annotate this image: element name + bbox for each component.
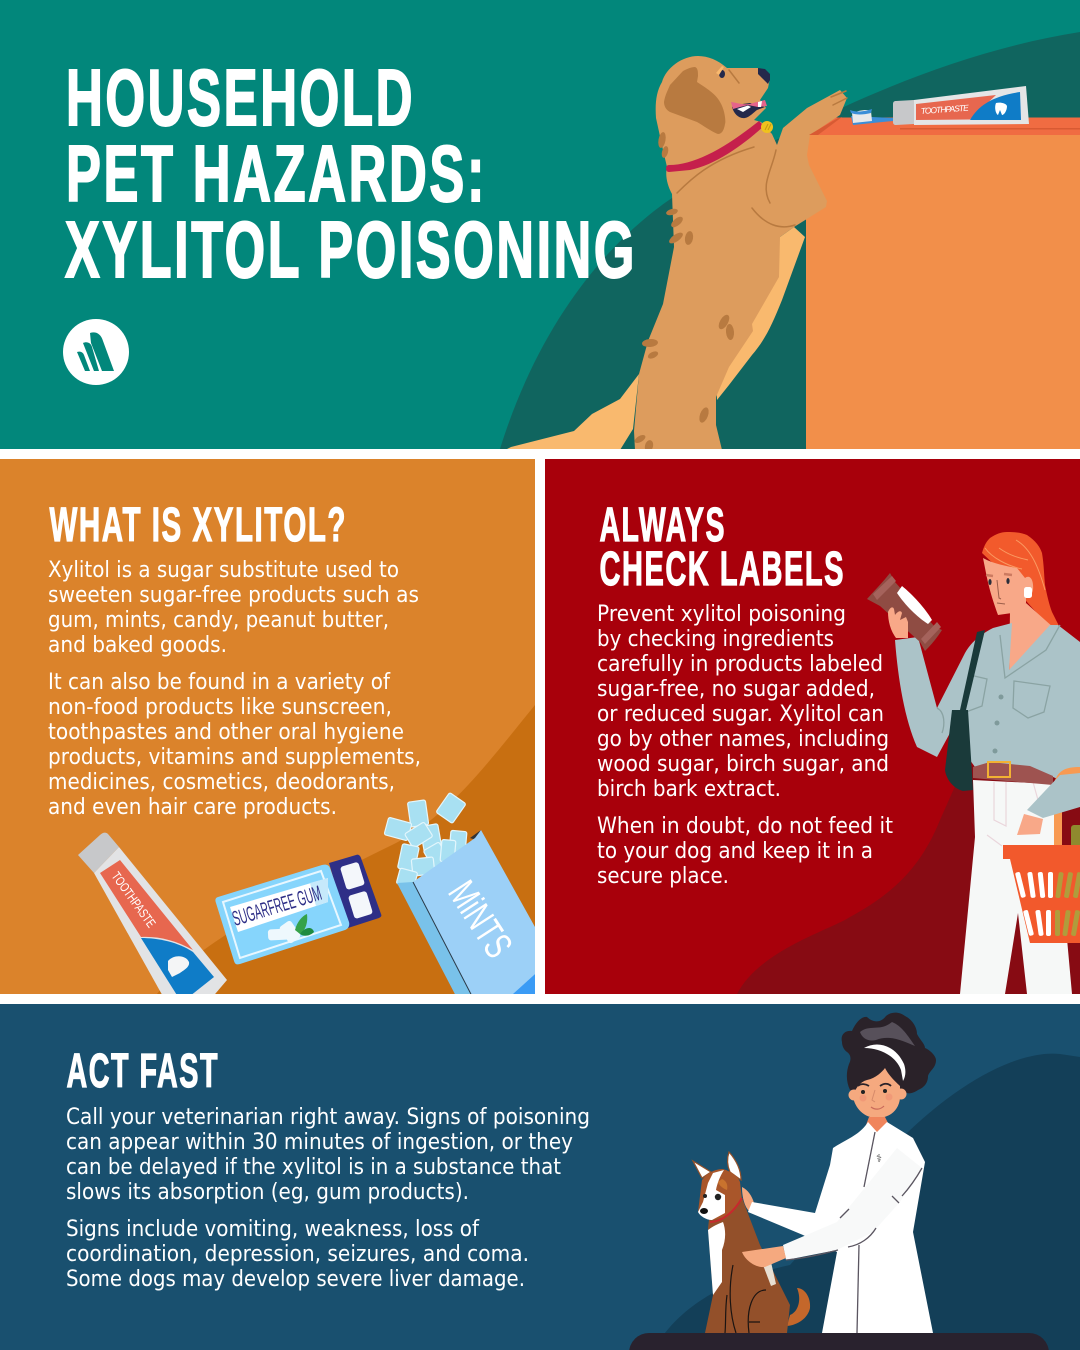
panel: what is xylitol <box>0 459 545 1000</box>
text block: label advice <box>597 602 893 889</box>
icon: sugarfree gum pack: SUGARFREE GUM <box>230 882 324 931</box>
illustration: veterinarian: ⚕ <box>876 1153 882 1165</box>
panel: act fast <box>0 1004 1080 1350</box>
text block: symptoms: can appear within 30 minutes of ingestion, or they <box>66 1130 573 1155</box>
text block: xylitol description: and baked goods. <box>48 633 227 658</box>
heading: always check labels: CHECK LABELS <box>600 543 845 596</box>
title: XYLITOL POISONING <box>65 205 637 294</box>
text block: label advice: carefully in products labeled <box>597 652 883 677</box>
text block: xylitol description: sweeten sugar-free products such as <box>48 583 419 608</box>
text block: xylitol description: It can also be found in a variety of <box>48 670 391 695</box>
text block: xylitol description <box>48 558 421 820</box>
text block: symptoms: Some dogs may develop severe liver damage. <box>66 1267 525 1292</box>
title: PET HAZARDS: <box>66 129 487 218</box>
text block: xylitol description: and even hair care products. <box>48 795 337 820</box>
icon: mints box: MiNTS <box>439 873 520 966</box>
heading: act fast: ACT FAST <box>66 1045 219 1098</box>
text block: label advice: Prevent xylitol poisoning <box>597 602 846 627</box>
text block: xylitol description: medicines, cosmetics, deodorants, <box>48 770 395 795</box>
text block: symptoms: Signs include vomiting, weakness, loss of <box>66 1217 480 1242</box>
heading: what is xylitol: WHAT IS XYLITOL? <box>50 499 347 552</box>
icon: toothpaste tube: TOOTHPASTE <box>109 869 159 931</box>
title: HOUSEHOLD <box>66 53 415 142</box>
panel: header <box>0 0 1080 453</box>
heading: always check labels: ALWAYS <box>600 499 726 552</box>
text block: label advice: sugar-free, no sugar added, <box>597 677 875 702</box>
examination table <box>629 1333 1049 1350</box>
icon: toothpaste tube <box>893 86 1029 125</box>
text block: xylitol description: gum, mints, candy, peanut butter, <box>48 608 389 633</box>
text block: label advice: secure place. <box>597 864 729 889</box>
icon: sugarfree gum pack <box>215 855 381 964</box>
text block: symptoms: can be delayed if the xylitol is in a substance that <box>66 1155 561 1180</box>
table <box>806 118 1080 449</box>
text block: symptoms: slows its absorption (eg, gum products). <box>66 1180 469 1205</box>
text block: symptoms: coordination, depression, seizures, and coma. <box>66 1242 529 1267</box>
text block: label advice: When in doubt, do not feed it <box>597 814 893 839</box>
text block: symptoms <box>66 1105 590 1292</box>
icon: mints box <box>384 792 545 1000</box>
text block: xylitol description: products, vitamins and supplements, <box>48 745 421 770</box>
icon: toothpaste tube: TOOTHPASTE <box>920 103 969 116</box>
text block: xylitol description: toothpastes and other oral hygiene <box>48 720 404 745</box>
text block: symptoms: Call your veterinarian right away. Signs of poisoning <box>66 1105 590 1130</box>
icon: toothpaste tube <box>78 833 227 1000</box>
text block: label advice: to your dog and keep it in a <box>597 839 873 864</box>
heading: always check labels <box>600 506 843 586</box>
illustration: brown dog <box>693 1152 810 1333</box>
title <box>64 68 632 279</box>
text block: xylitol description: Xylitol is a sugar substitute used to <box>48 558 399 583</box>
icon: toothbrush <box>850 109 893 125</box>
text block: label advice: birch bark extract. <box>597 777 781 802</box>
text block: xylitol description: non-food products like sunscreen, <box>48 695 392 720</box>
illustration: dog reaching for toothpaste <box>505 56 847 453</box>
text block: label advice: go by other names, including <box>597 727 889 752</box>
icon: logo <box>63 319 129 385</box>
text block: label advice: by checking ingredients <box>597 627 834 652</box>
panel: always check labels <box>545 459 1080 994</box>
text block: label advice: or reduced sugar. Xylitol can <box>597 702 884 727</box>
illustration: veterinarian <box>742 1013 936 1333</box>
text block: label advice: wood sugar, birch sugar, and <box>597 752 889 777</box>
illustration: woman reading label <box>867 532 1080 994</box>
